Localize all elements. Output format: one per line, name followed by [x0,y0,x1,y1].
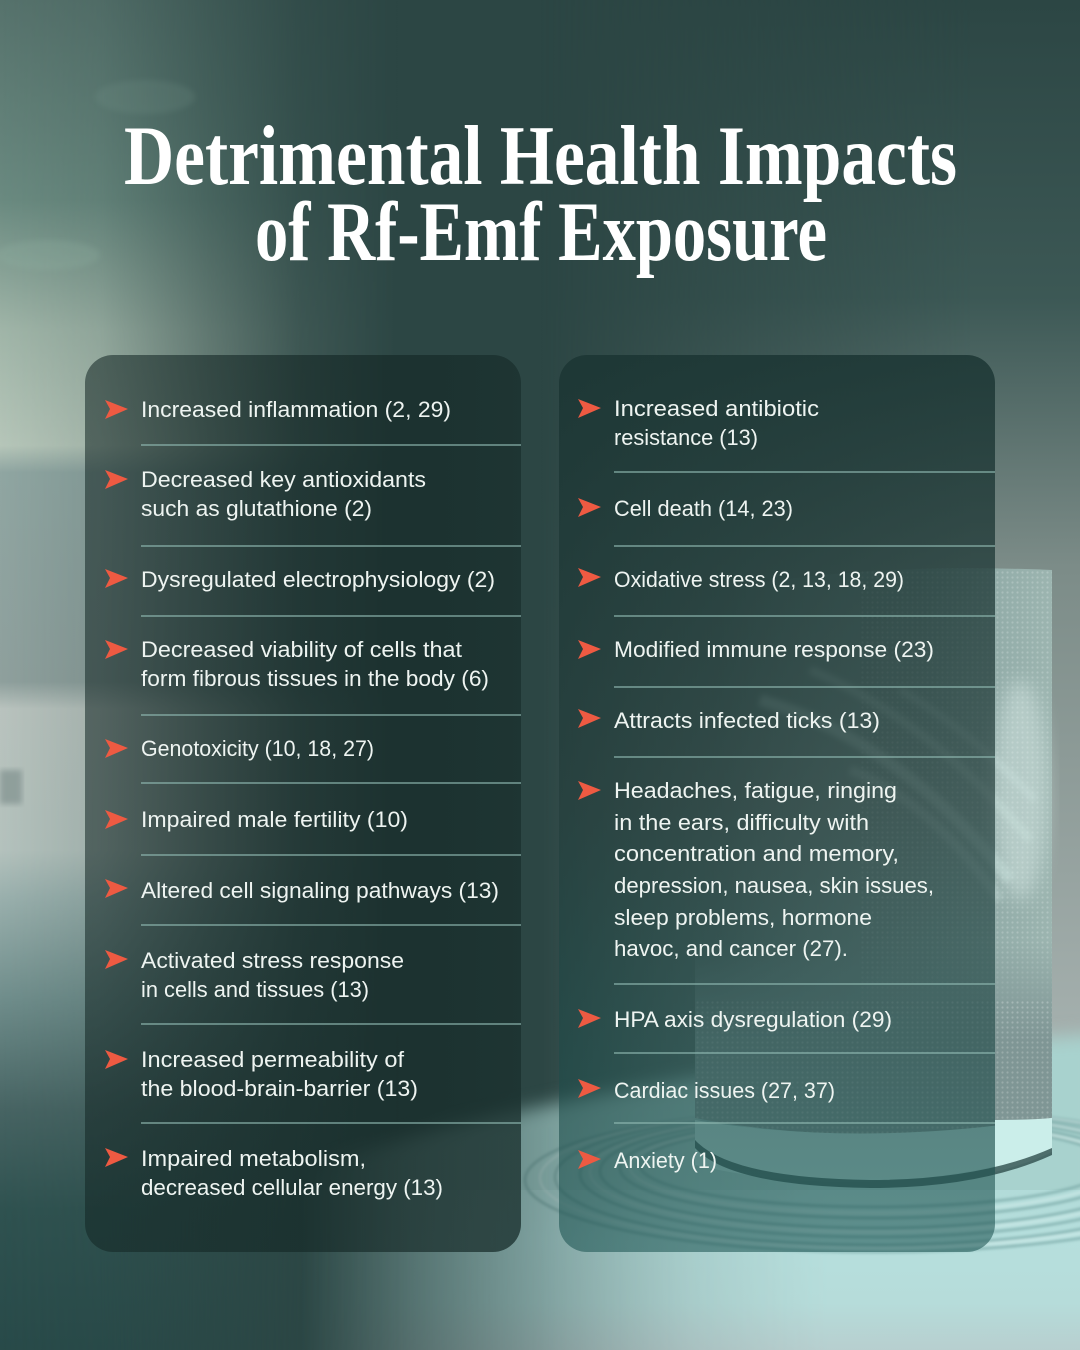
item: cell signaling: Altered cell signaling pathways (13) [141,878,499,903]
item: antioxidants: Decreased key antioxidants [141,467,426,492]
item: infected ticks: Attracts infected ticks (13) [614,708,880,733]
item: headaches and symptoms [578,778,934,961]
item: metabolism: Impaired metabolism, [141,1146,366,1171]
item: cardiac issues: Cardiac issues (27, 37) [614,1078,835,1103]
item: anxiety: Anxiety (1) [614,1148,717,1173]
item: metabolism: decreased cellular energy (13) [141,1175,443,1200]
background: mesh cylinder device [695,568,1052,1188]
item: blood-brain barrier [105,1047,418,1101]
item: headaches and symptoms: havoc, and cancer (27). [614,936,848,961]
item: headaches and symptoms: depression, nausea, skin issues, [614,873,934,898]
item: antioxidants [105,467,426,521]
item: blood-brain barrier: the blood-brain-barrier (13) [141,1076,418,1101]
item: stress response [105,948,404,1002]
title: of Rf-Emf Exposure [255,185,827,279]
item: inflammation: Increased inflammation (2, 29) [141,397,451,422]
item: electrophysiology: Dysregulated electrophysiology (2) [141,567,495,592]
item: stress response: in cells and tissues (13) [141,977,369,1002]
item: metabolism [105,1146,443,1200]
item: headaches and symptoms: sleep problems, hormone [614,905,872,930]
item: oxidative stress: Oxidative stress (2, 13, 18, 29) [614,567,904,592]
item: HPA axis: HPA axis dysregulation (29) [614,1007,892,1032]
item: male fertility: Impaired male fertility (10) [141,807,408,832]
panel: left list [85,355,521,1252]
item: antioxidants: such as glutathione (2) [141,496,372,521]
item: headaches and symptoms: Headaches, fatigue, ringing [614,778,897,803]
item: cell viability: Decreased viability of cells that [141,637,462,662]
item: stress response: Activated stress response [141,948,404,973]
item: antibiotic resistance: resistance (13) [614,425,758,450]
item: immune response: Modified immune response (23) [614,637,934,662]
item: antibiotic resistance [578,396,819,450]
item: cell death: Cell death (14, 23) [614,496,793,521]
background: water floor with ripples [300,1034,1080,1350]
item: blood-brain barrier: Increased permeability of [141,1047,405,1072]
item: headaches and symptoms: concentration and memory, [614,841,899,866]
item: antibiotic resistance: Increased antibiotic [614,396,819,421]
item: cell viability [105,637,489,691]
item: cell viability: form fibrous tissues in the body (6) [141,666,489,691]
item: headaches and symptoms: in the ears, difficulty with [614,810,869,835]
panel: right list [559,355,995,1252]
title [124,109,957,279]
item: genotoxicity: Genotoxicity (10, 18, 27) [141,736,374,761]
